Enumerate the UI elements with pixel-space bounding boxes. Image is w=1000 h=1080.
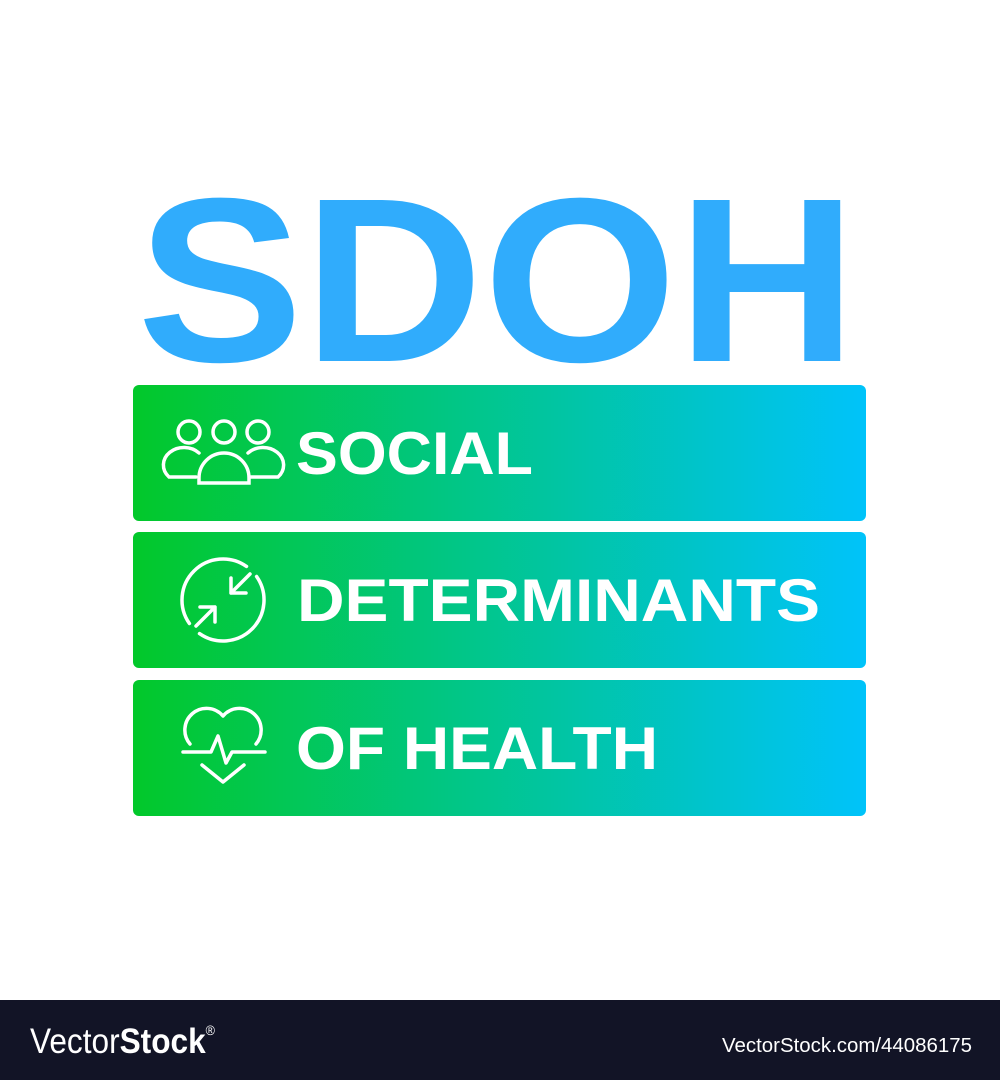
footer logo: VectorStock [30, 1022, 215, 1061]
label: of health: OF HEALTH [296, 715, 658, 782]
label: social: SOCIAL [296, 420, 533, 487]
icon: people [163, 421, 284, 483]
panel: social [133, 385, 866, 521]
title: SDOH [137, 149, 857, 411]
label: determinants: DETERMINANTS [297, 567, 820, 634]
footer url: VectorStock.com/44086175 [722, 1035, 972, 1057]
icon: arrows circle [182, 559, 264, 641]
icon: heart pulse [183, 708, 265, 782]
footer [0, 1000, 1000, 1080]
footer logo: ® [206, 1022, 216, 1038]
panel: determinants [133, 532, 866, 668]
panel: of health [133, 680, 866, 816]
